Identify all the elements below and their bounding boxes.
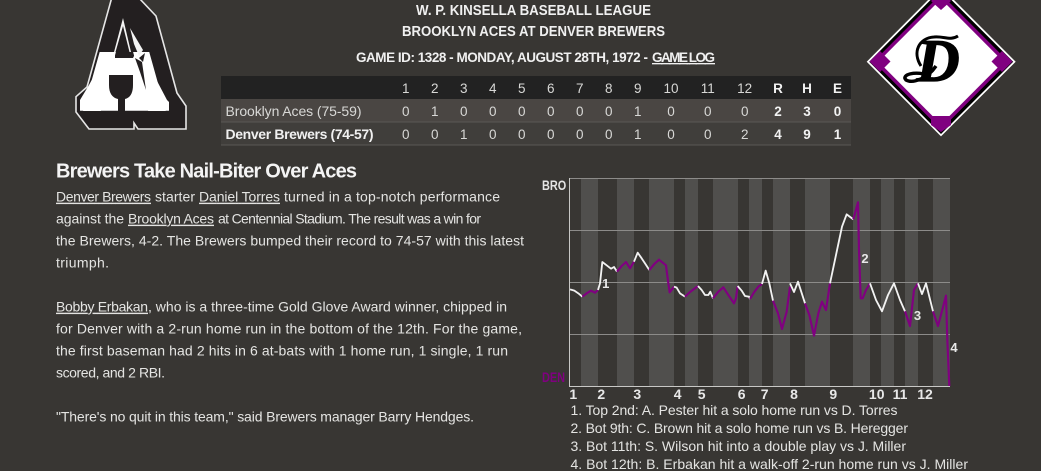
inning axis labels: 2: [597, 386, 605, 402]
icon: Denver Brewers logo: [867, 0, 1016, 136]
Denver Brewers row: Denver Brewers (74-57): [226, 126, 374, 142]
Brooklyn Aces row: 0: [547, 104, 554, 119]
inning axis labels: 1: [569, 386, 577, 402]
Brooklyn Aces row: 2: [774, 104, 782, 119]
game information line: GAME ID: 1328 - MONDAY, AUGUST 28TH, 1972 -: [356, 50, 648, 65]
Denver Brewers row: 0: [402, 127, 409, 142]
Brooklyn Aces row: 0: [605, 104, 612, 119]
inning header row: 7: [576, 81, 583, 96]
Brooklyn Aces row: [226, 103, 841, 119]
Denver Brewers row: 0: [518, 127, 525, 142]
inning header row: 8: [605, 81, 612, 96]
Brooklyn Aces row: 0: [489, 104, 496, 119]
Brooklyn Aces row: 1: [634, 104, 641, 119]
win probability line: [570, 202, 949, 386]
Brooklyn Aces row: 0: [576, 104, 583, 119]
text block: game recap paragraph: [56, 189, 524, 271]
inning axis labels: 9: [829, 386, 837, 402]
Denver Brewers row: 0: [489, 127, 496, 142]
Denver Brewers row: 9: [803, 127, 811, 142]
team axis label: Brooklyn: BRO: [542, 178, 566, 193]
text block: game recap paragraph: turned in a top-notch performance: [284, 189, 500, 205]
Denver Brewers row: 0: [431, 127, 438, 142]
text block: game recap paragraph: the Brewers, 4-2. The Brewers bumped their record to 74-57 with this latest: [56, 233, 524, 249]
text block: game recap paragraph: against the: [56, 211, 124, 227]
inning header row: R: [773, 81, 783, 96]
text block: manager quote: "There's no quit in this team," said Brewers manager Barry Hendges.: [56, 409, 474, 425]
inning header row: 3: [460, 81, 467, 96]
Denver Brewers row: 0: [667, 127, 675, 142]
text block: player paragraph: Bobby Erbakan: [56, 299, 148, 315]
game information line: GAME LOG: [652, 50, 715, 65]
line score table: [221, 76, 851, 146]
inning header row: 4: [489, 81, 497, 96]
text block: key plays list: 3. Bot 11th: S. Wilson hit into a double play vs J. Miller: [570, 438, 906, 454]
Denver Brewers row: [226, 126, 842, 142]
inning axis labels: 5: [698, 386, 706, 402]
inning header row: 2: [431, 81, 438, 96]
title: matchup: BROOKLYN ACES AT DENVER BREWERS: [402, 24, 665, 40]
text block: player paragraph: for Denver with a 2-run home run in the bottom of the 12th. For the game,: [56, 321, 522, 337]
Denver Brewers row: 1: [634, 127, 641, 142]
event markers: 2: [861, 251, 869, 266]
inning header row: 9: [634, 81, 641, 96]
Denver Brewers row: 0: [547, 127, 554, 142]
text block: player paragraph: the first baseman had 2 hits in 6 at-bats with 1 home run, 1 single, 1 run: [56, 343, 508, 359]
inning axis labels: 3: [633, 386, 641, 402]
text block: key plays list: 1. Top 2nd: A. Pester hit a solo home run vs D. Torres: [570, 402, 898, 418]
text block: game recap paragraph: triumph.: [56, 255, 109, 271]
event markers: 3: [914, 308, 921, 323]
inning header row: 10: [663, 81, 679, 96]
inning axis labels: 8: [790, 386, 798, 402]
heading: article title: Brewers Take Nail-Biter Over Aces: [56, 161, 357, 183]
Brooklyn Aces row: 1: [431, 104, 438, 119]
text block: game recap paragraph: starter: [155, 189, 195, 205]
text block: player paragraph: scored, and 2 RBI.: [56, 365, 165, 381]
Brooklyn Aces row: 0: [741, 104, 748, 119]
inning header row: [402, 81, 842, 96]
Denver Brewers row: 4: [774, 127, 782, 142]
text block: game recap paragraph: Denver Brewers: [56, 189, 151, 205]
Brooklyn Aces row: 0: [667, 104, 675, 119]
Denver Brewers row: 0: [704, 127, 711, 142]
Denver Brewers row: 0: [576, 127, 583, 142]
text block: game recap paragraph: Daniel Torres: [199, 189, 280, 205]
event markers: 1: [602, 276, 609, 291]
inning bands: [581, 178, 950, 386]
text block: key plays list: 2. Bot 9th: C. Brown hit a solo home run vs B. Heregger: [570, 420, 908, 436]
text block: player paragraph: , who is a three-time Gold Glove Award winner, chipped in: [148, 299, 507, 315]
event markers: [602, 251, 958, 355]
Brooklyn Aces row: 0: [402, 104, 409, 119]
Denver Brewers row: 1: [834, 127, 842, 142]
Brooklyn Aces row: 0: [834, 104, 841, 119]
Brooklyn Aces row: 0: [460, 104, 467, 119]
Brooklyn Aces row: 0: [518, 104, 525, 119]
Brooklyn Aces row: Brooklyn Aces (75-59): [226, 103, 362, 119]
inning header row: 6: [547, 81, 554, 96]
inning header row: 5: [518, 81, 525, 96]
team axis label: Denver: DEN: [542, 370, 565, 385]
Brooklyn Aces row: 3: [803, 104, 811, 119]
Brooklyn Aces row: 0: [704, 104, 711, 119]
icon: Denver Brewers logo: D: [915, 28, 960, 94]
text block: key plays list: [570, 402, 968, 471]
event markers: 4: [950, 340, 958, 355]
text block: game recap paragraph: at Centennial Stadium. The result was a win for: [218, 211, 481, 227]
Denver Brewers row: 2: [741, 127, 748, 142]
inning header row: 1: [402, 81, 409, 96]
inning axis labels: 11: [893, 386, 908, 402]
inning header row: E: [833, 81, 842, 96]
Denver Brewers row: 1: [460, 127, 467, 142]
inning axis labels: 7: [761, 386, 769, 402]
text block: player paragraph: [56, 299, 522, 381]
title: league name: W. P. KINSELLA BASEBALL LEAGUE: [416, 3, 651, 19]
inning axis labels: [569, 386, 933, 402]
inning header row: 11: [701, 81, 715, 96]
inning axis labels: 10: [869, 386, 885, 402]
inning header row: H: [802, 81, 812, 96]
inning axis labels: 12: [917, 386, 933, 402]
Denver Brewers row: 0: [605, 127, 612, 142]
inning header row: 12: [737, 81, 752, 96]
text block: game recap paragraph: Brooklyn Aces: [128, 211, 214, 227]
inning axis labels: 6: [738, 386, 746, 402]
inning axis labels: 4: [674, 386, 682, 402]
win probability chart: [542, 178, 958, 402]
